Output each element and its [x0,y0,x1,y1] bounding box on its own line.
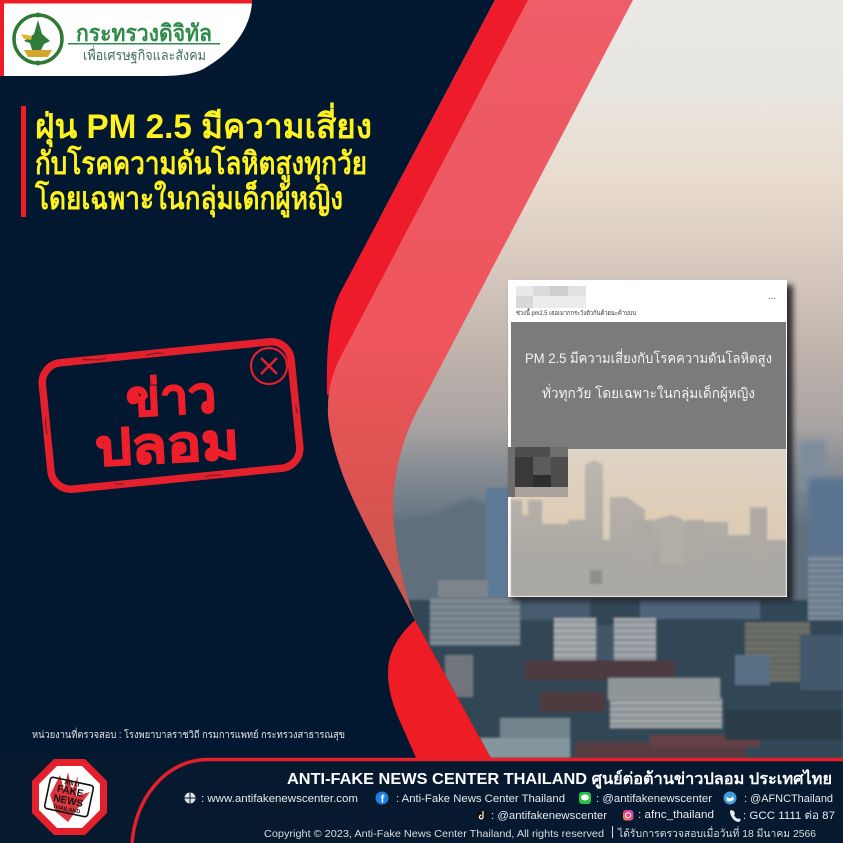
source agency note: หน่วยงานที่ตรวจสอบ : โรงพยาบาลราชวิถี กรมการแพทย์ กระทรวงสาธารณสุข [32,727,345,741]
icon: instagram [623,810,634,820]
icon: twitter [724,792,736,804]
ministry emblem [14,12,62,66]
title: ฝุ่น PM 2.5 มีความเสี่ยง [35,102,372,148]
icon: facebook [376,792,388,806]
stamp close icon [251,348,287,384]
website address: : www.antifakenewscenter.com [201,793,358,805]
copyright: Copyright © 2023, Anti-Fake News Center Thailand, All rights reserved [264,828,604,840]
icon: phone [730,810,741,822]
title [34,102,372,218]
blurred profile [516,286,586,308]
post message [525,349,772,402]
social post screenshot [508,280,787,597]
ministry tagline: เพื่อเศรษฐกิจและสังคม [83,46,206,64]
grey message panel [511,322,786,449]
icon: website [184,792,196,804]
title: โดยเฉพาะในกลุ่มเด็กผู้หญิง [34,179,343,218]
footer band [0,758,843,843]
anti-fake news logo: THAILAND [52,804,81,816]
navy background panel [0,0,495,843]
post message: ทั่วทุกวัย โดยเฉพาะในกลุ่มเด็กผู้หญิง [542,384,755,402]
anti-fake news logo: ANTI [64,779,80,789]
icon: facebook: f [381,794,385,806]
lower red curve [388,620,492,760]
fake news stamp [39,339,303,492]
stamp text: ข่าว [125,367,218,427]
phone number: : GCC 1111 ต่อ 87 [743,810,835,822]
stamp text: ปลอม [94,413,240,477]
bright red ribbon [327,0,540,395]
icon: line [579,792,591,804]
footer heading: ANTI-FAKE NEWS CENTER THAILAND ศูนย์ต่อต้านข่าวปลอม ประเทศไทย [287,769,832,790]
screenshot shadow [512,285,793,601]
stamp text [94,367,240,477]
tiktok account: : @antifakenewscenter [491,810,607,822]
anti-fake news logo: FAKE [56,783,85,800]
stamp frame [39,339,303,492]
post menu dots: ... [768,291,776,302]
blurred mosaic [508,447,568,497]
ministry name: กระทรวงดิจิทัล [76,20,212,46]
facebook page: : Anti-Fake News Center Thailand [396,793,565,805]
instagram account: : afnc_thailand [638,809,714,821]
translucent red ribbon [328,0,633,620]
anti-fake news logo: NEWS [52,793,84,810]
anti-fake news logo [32,759,107,835]
twitter account: : @AFNCThailand [744,793,833,805]
post message: PM 2.5 มีความเสี่ยงกับโรคความดันโลหิตสูง [525,349,772,367]
verification date: ได้รับการตรวจสอบเมื่อวันที่ 18 มีนาคม 2566 [617,826,816,840]
background city photo [380,0,843,760]
header badge [0,0,252,76]
title accent bar [21,106,26,217]
icon: tiktok [476,810,488,820]
post skyline photo [511,449,786,596]
line account: : @antifakenewscenter [596,793,712,805]
title: กับโรคความดันโลหิตสูงทุกวัย [35,145,367,183]
post caption: ช่วงนี้ pm2.5 เธอเมากกระวังตัวกันด้วยนะค้าบบบ [516,308,636,317]
